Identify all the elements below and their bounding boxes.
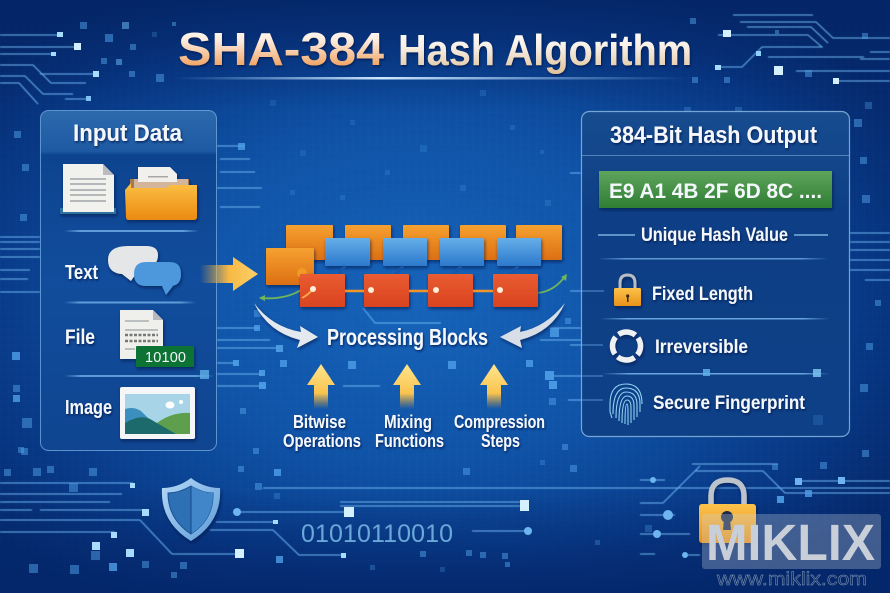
arrow: left curved to processing blocks bbox=[254, 303, 318, 348]
icon: file with binary bbox=[120, 310, 194, 367]
label: file: File bbox=[65, 326, 95, 349]
arrow: bitwise operations bbox=[307, 364, 335, 409]
icon: shield bbox=[162, 478, 220, 541]
label: mixing functions: Functions bbox=[375, 431, 444, 451]
label: secure fingerprint: Secure Fingerprint bbox=[653, 392, 805, 414]
title bbox=[178, 23, 692, 75]
orange blocks bbox=[286, 225, 562, 260]
heading: hash output: 384-Bit Hash Output bbox=[610, 122, 817, 149]
label: image: Image bbox=[65, 397, 112, 419]
heading: processing blocks: Processing Blocks bbox=[327, 324, 488, 350]
arrow: mixing functions bbox=[393, 364, 421, 409]
icon: fingerprint bbox=[610, 384, 642, 425]
title: SHA-384 bbox=[178, 23, 384, 75]
arrow: right curved to processing blocks bbox=[500, 303, 565, 348]
green flow curves bbox=[260, 275, 566, 298]
icon: large padlock bbox=[699, 480, 756, 543]
label: bitwise operations: Operations bbox=[283, 431, 361, 451]
label: mixing functions bbox=[375, 412, 444, 451]
icon: document bbox=[60, 164, 116, 214]
icon: folder bbox=[125, 167, 197, 220]
watermark: MIKLIX bbox=[706, 514, 875, 571]
label: mixing functions: Mixing bbox=[384, 412, 432, 432]
label: bitwise operations: Bitwise bbox=[293, 412, 346, 432]
hash value bar bbox=[599, 171, 832, 208]
label: unique hash value: Unique Hash Value bbox=[641, 225, 788, 246]
panel: hash output bbox=[581, 112, 850, 436]
watermark: www.miklix.com bbox=[716, 569, 867, 589]
icon: image bbox=[120, 387, 195, 439]
icon: padlock bbox=[614, 275, 641, 306]
arrow: input to processing bbox=[200, 257, 258, 291]
red blocks bbox=[300, 274, 538, 307]
binary string: 01010110010 bbox=[301, 520, 453, 548]
large orange block bbox=[266, 248, 314, 285]
blue blocks bbox=[325, 238, 541, 266]
icon: circular arrows bbox=[607, 327, 646, 365]
label: irreversible: Irreversible bbox=[655, 336, 748, 358]
label: compression steps bbox=[454, 412, 545, 451]
title: Hash Algorithm bbox=[398, 26, 692, 75]
chart: processing blocks bbox=[259, 225, 567, 307]
panel: input data bbox=[40, 110, 216, 450]
label: fixed length: Fixed Length bbox=[652, 283, 753, 305]
heading: input data: Input Data bbox=[73, 120, 183, 147]
label: bitwise operations bbox=[283, 412, 361, 451]
label: compression steps: Compression bbox=[454, 412, 545, 432]
label: text: Text bbox=[65, 262, 98, 284]
hash value bar: E9 A1 4B 2F 6D 8C .... bbox=[609, 180, 822, 203]
icon: speech bubbles bbox=[108, 246, 181, 295]
arrow: compression steps bbox=[480, 364, 508, 409]
icon: file with binary: 10100 bbox=[145, 350, 186, 366]
label: compression steps: Steps bbox=[481, 431, 520, 451]
